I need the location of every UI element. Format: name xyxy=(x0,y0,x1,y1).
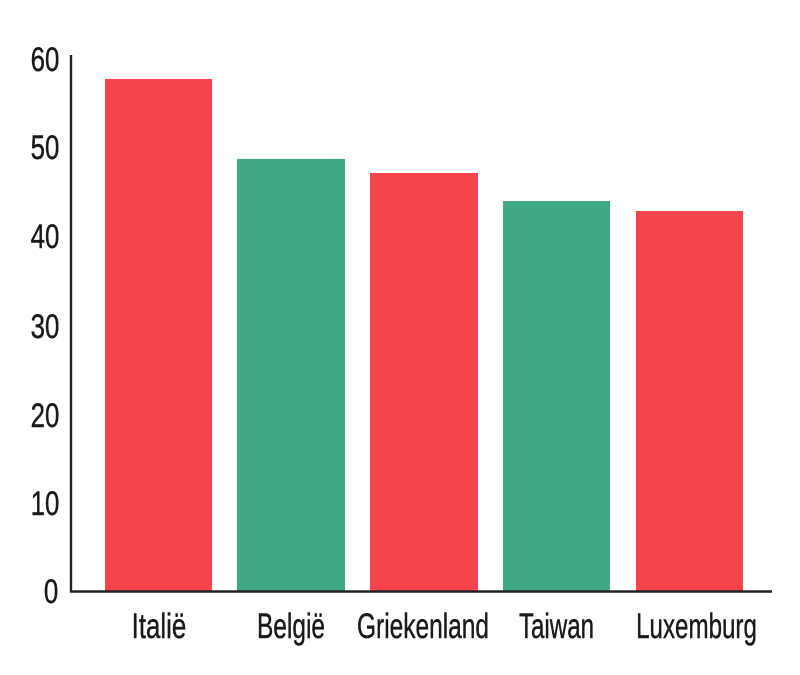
x axis labels: Griekenland xyxy=(357,608,489,646)
y axis labels: 10 xyxy=(31,486,59,523)
x axis labels: Luxemburg xyxy=(636,608,757,646)
y axis labels: 0 xyxy=(44,574,58,611)
axes xyxy=(71,55,772,592)
bar: Griekenland xyxy=(370,173,478,591)
bar: België xyxy=(237,159,345,591)
bar: Taiwan xyxy=(503,201,610,591)
x axis labels: Taiwan xyxy=(519,608,594,646)
y axis labels: 60 xyxy=(31,42,59,79)
y axis labels: 20 xyxy=(31,398,59,435)
x axis labels: Italië xyxy=(132,606,186,646)
y axis labels: 40 xyxy=(31,219,59,256)
y axis labels: 50 xyxy=(31,130,59,167)
bar: Luxemburg xyxy=(636,211,743,591)
bars xyxy=(105,79,743,591)
x axis labels xyxy=(132,606,757,646)
x axis labels: België xyxy=(257,608,325,646)
y axis labels: 30 xyxy=(31,309,59,346)
y axis labels xyxy=(31,42,59,611)
bar: Italië xyxy=(105,79,212,591)
